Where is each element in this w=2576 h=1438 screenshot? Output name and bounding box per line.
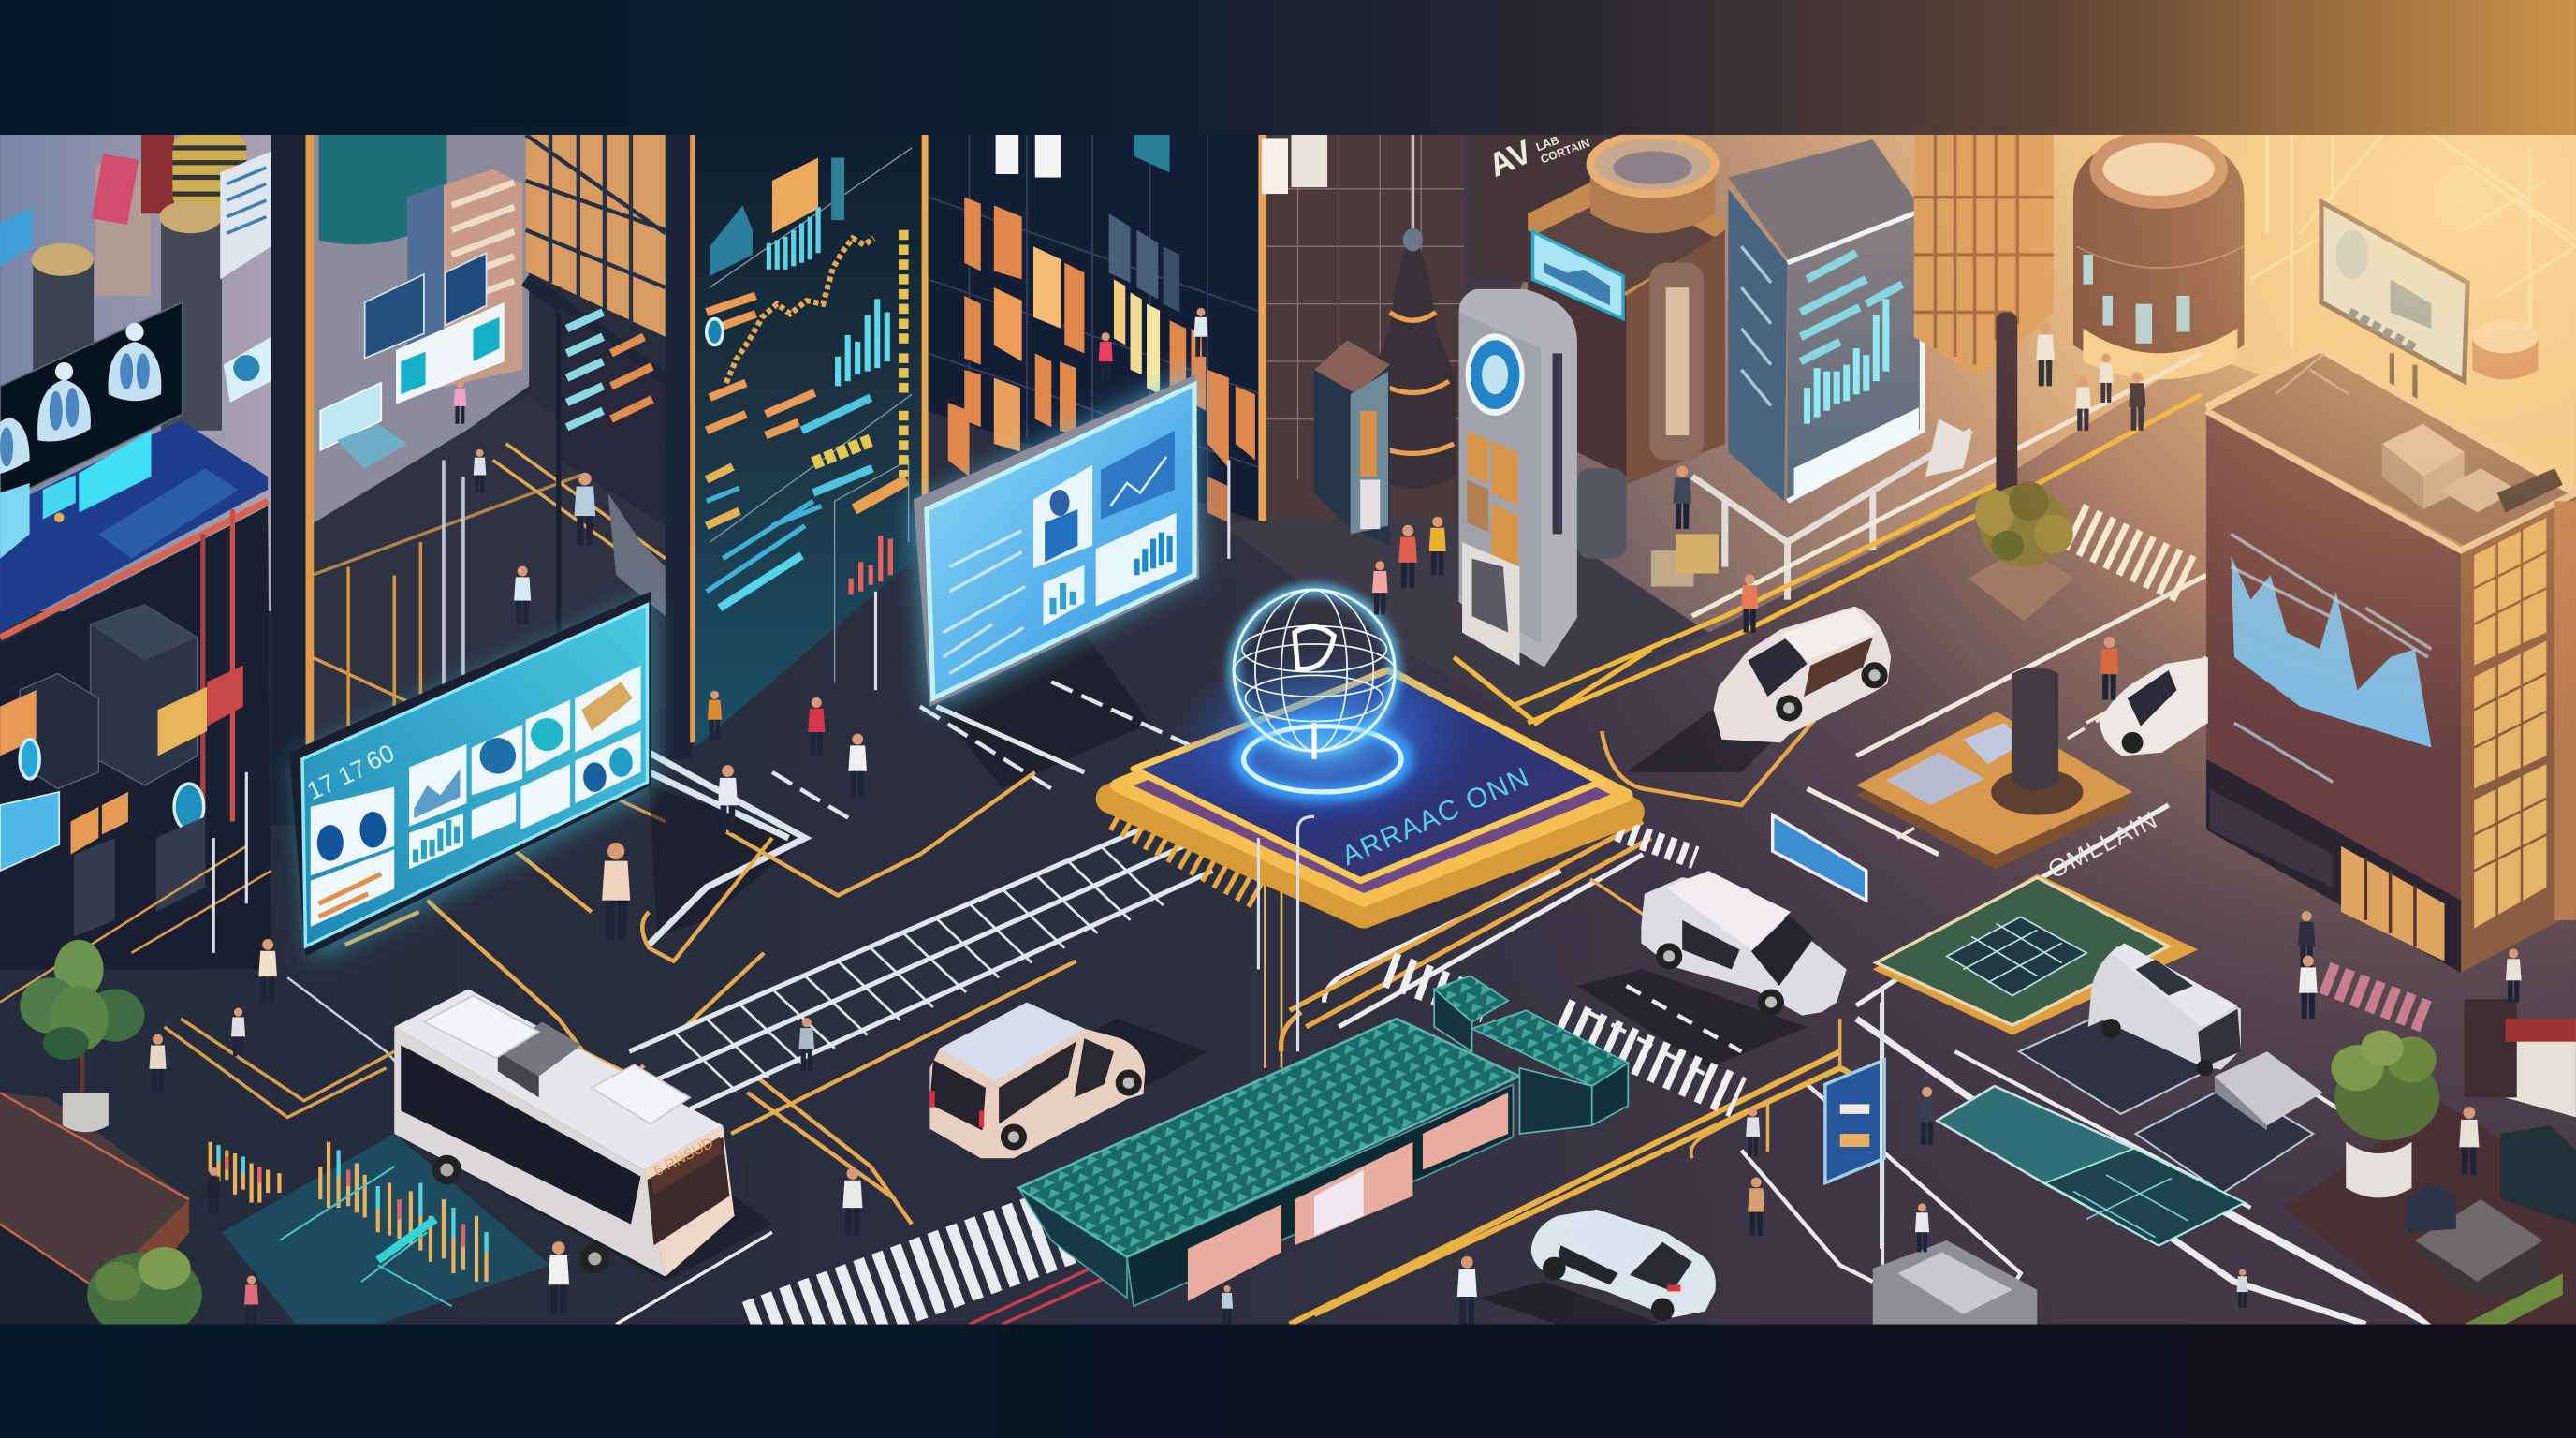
shadows under vehicles and screens [394, 633, 1808, 1331]
glowing grid building [1914, 135, 2054, 378]
orange and teal top blocks [710, 157, 844, 276]
road sign blue small [1773, 814, 1866, 901]
planter tree right [2331, 1030, 2439, 1197]
crosswalk platform [1618, 829, 1695, 858]
kerb box [2215, 1051, 2323, 1130]
ground floor lobby [2206, 759, 2461, 973]
x-ray screen [0, 302, 183, 503]
sign text: LAB [1534, 133, 1561, 154]
footer band [0, 1325, 2576, 1438]
cylinder tank B [159, 200, 222, 431]
teal circuit pad lower [1937, 1086, 2244, 1245]
car right top [1714, 607, 1891, 742]
lattice building [526, 135, 666, 674]
pedestrians [149, 308, 2522, 1325]
line chart card [1101, 431, 1175, 520]
white road edges [649, 753, 805, 945]
car bottom [1531, 1210, 1716, 1321]
plaza lines [313, 444, 666, 846]
tree bottom left [87, 1247, 202, 1338]
rooftop drum [1590, 135, 1715, 233]
street sign [1825, 986, 1884, 1265]
cylinder tank A [31, 243, 94, 371]
rooftop billboard [2321, 202, 2467, 427]
cyan bar chart [838, 299, 887, 386]
warm road markings [1454, 353, 2206, 855]
warm street pole [1996, 312, 2017, 509]
hologram glow [1175, 649, 1471, 829]
left plant district [0, 135, 272, 1003]
colourful ground bar chart [211, 1134, 550, 1325]
canopy [1692, 431, 1971, 600]
pink screens [1188, 1093, 1508, 1301]
clock tower kiosk [1459, 289, 1577, 668]
bars card [1096, 513, 1177, 607]
rocket spire tower [1370, 135, 1456, 488]
header band [0, 0, 2576, 135]
candlestick chart [726, 238, 874, 383]
portrait card [1033, 465, 1092, 568]
road text: OMLLAIN [2043, 805, 2162, 884]
storage canister [1577, 468, 1719, 587]
small bar card [1044, 565, 1084, 626]
crosswalk middle east [1560, 1019, 1738, 1097]
central holographic platform [1110, 590, 1630, 914]
red tram lines [970, 1249, 1134, 1325]
sidewalk warm top right [1445, 135, 2576, 633]
clock second digits: 60 [362, 739, 399, 776]
platform label: ARRAAC ONN [1338, 761, 1535, 872]
lamp posts [213, 460, 1881, 1249]
outline plot [2019, 1005, 2313, 1193]
crosswalk bottom [755, 1224, 1068, 1339]
orange data centre [1471, 124, 1725, 485]
hologram sphere [1234, 590, 1395, 759]
warm sun glow [1906, 0, 2576, 756]
screen halo [914, 372, 1199, 712]
utility kiosk bottom [1873, 1240, 2037, 1325]
clock digits: 17 17 [302, 754, 371, 805]
monument plinth [1856, 668, 2132, 869]
dark structural columns [271, 135, 695, 825]
peach tower [407, 169, 522, 394]
crosswalk warm [2073, 526, 2193, 583]
sign text: CORTAIN [1539, 136, 1591, 166]
cylinder building [2073, 137, 2244, 379]
car far right [2100, 657, 2208, 756]
logo dot [707, 318, 723, 345]
plaza under clock tower [1224, 519, 1708, 670]
facade gold windows [2474, 518, 2546, 929]
warm light falloff on street [1464, 135, 2576, 1150]
mid left plaza between columns [309, 135, 666, 855]
white cards [311, 666, 641, 927]
round bollard [2472, 320, 2539, 379]
data tower facade [695, 135, 929, 748]
tower bar chart [1808, 299, 1886, 424]
mountain area chart [2231, 555, 2431, 748]
light pipeline grid [2250, 135, 2576, 348]
equipment yard [0, 506, 271, 1003]
van white [929, 1003, 1145, 1158]
window tower [929, 135, 1266, 522]
car centre silver [1641, 871, 1847, 1016]
blue control desk [0, 420, 268, 638]
pink crosswalk [2324, 977, 2431, 1019]
rooftop units [2276, 353, 2563, 513]
capsule column [1649, 263, 1704, 460]
screen halo [296, 598, 651, 960]
screen dashboard large [289, 592, 651, 960]
kiosk [1314, 340, 1390, 546]
floating info cards [320, 253, 505, 468]
big corner building [2206, 348, 2576, 973]
bus [394, 990, 748, 1277]
brown grid wall [1262, 135, 1464, 521]
cyan wall screen [1532, 231, 1623, 318]
striped tank [172, 135, 246, 209]
teal canopy pavilion [1018, 976, 1628, 1306]
teal tank [319, 135, 446, 244]
crosswalk middle west [1388, 969, 1486, 1005]
screen dashboard doctor [914, 372, 1199, 712]
small red bars [851, 536, 890, 594]
bus destination: 6 RNSUD [651, 1136, 716, 1180]
ground lines cool [165, 682, 2481, 1325]
tree left large [20, 940, 145, 1132]
info panels on tanks [0, 151, 271, 403]
teal circuit pad upper [1873, 874, 2198, 1035]
low roof building [0, 1093, 189, 1325]
status rows [707, 230, 907, 608]
dashboard tower [1692, 139, 1971, 600]
right plaza [2284, 999, 2576, 1325]
gold circuit lines [345, 846, 764, 1077]
sign logo: AV [1484, 133, 1538, 184]
warm planter tree [1969, 481, 2073, 621]
gold comb under platform [1117, 814, 1265, 895]
grid crosswalk [629, 816, 1212, 1109]
glow ring [1240, 725, 1405, 794]
van grey right [2088, 943, 2241, 1077]
